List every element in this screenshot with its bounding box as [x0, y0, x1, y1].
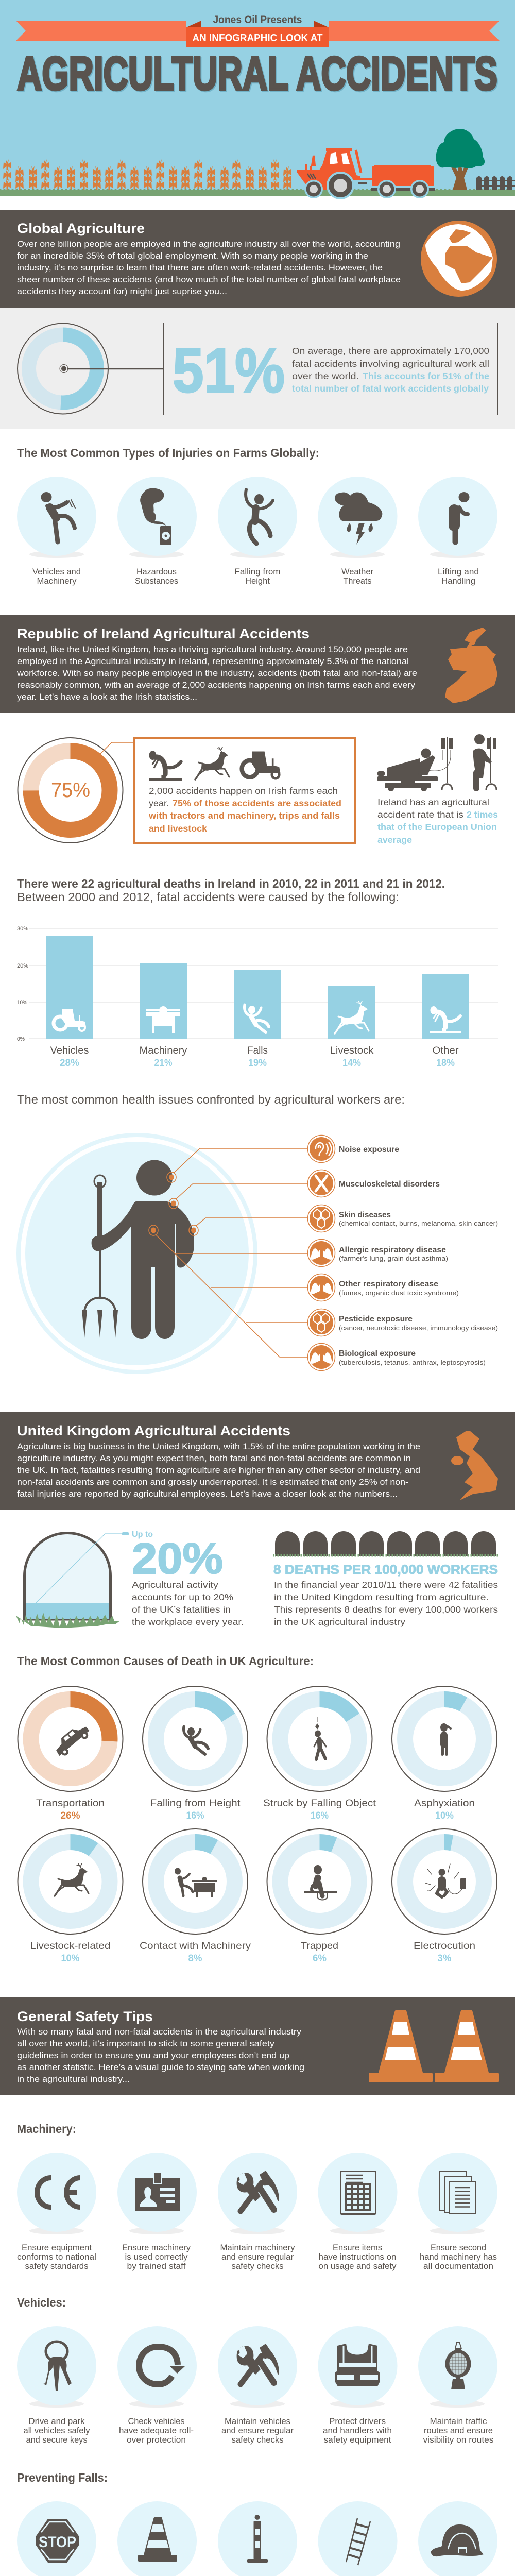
- callout text: 2,000 accidents happen on Irish farms each: [149, 786, 338, 796]
- heading: Republic of Ireland Agricultural Accidents: [17, 626, 310, 641]
- tip: maintain vehicles: safety checks: [232, 2435, 283, 2445]
- donut: electrocution: [392, 1829, 497, 1964]
- health item: noise exposure: Noise exposure: [339, 1145, 399, 1154]
- text block: accidents they account for) might just suprise you...: [17, 287, 227, 296]
- text block: [17, 1442, 420, 1499]
- gravestone graphic: 20%: [16, 1532, 129, 1628]
- panel: general safety tips: [0, 1997, 515, 2095]
- chart axis: 30%: [17, 926, 28, 932]
- tip: trained staff: [117, 2153, 197, 2271]
- heading: injury types: The Most Common Types of Injuries on Farms Globally:: [17, 446, 319, 460]
- injury: lifting and handling: Handling: [441, 577, 475, 586]
- tip: maintain machinery: and ensure regular: [221, 2252, 294, 2262]
- body markers: [149, 1172, 198, 1235]
- tip: documentation: all documentation: [423, 2262, 493, 2271]
- injury: weather threats: Weather: [341, 567, 374, 577]
- heading: United Kingdom Agricultural Accidents: [17, 1423, 290, 1438]
- donut: falling from height: 16%: [186, 1810, 204, 1821]
- bar: vehicles: [46, 936, 93, 1069]
- health item: other respiratory disease: (fumes, organic dust toxic syndrome): [339, 1289, 459, 1297]
- text block: Agriculture is big business in the United Kingdom, with 1.5% of the entire population working in the: [17, 1442, 420, 1451]
- tip: instructions: [318, 2153, 398, 2271]
- donut: asphyxiation: [392, 1686, 497, 1821]
- injury: falling from height: Height: [245, 577, 270, 586]
- tip: maintain machinery: Maintain machinery: [220, 2243, 295, 2252]
- tip: work at height: [218, 2501, 297, 2576]
- donut: trapped: [267, 1829, 372, 1964]
- health item: allergic respiratory disease: Allergic respiratory disease: [339, 1246, 446, 1255]
- health item: allergic respiratory disease: (farmer's lung, grain dust asthma): [339, 1255, 448, 1262]
- bar: other: 18%: [436, 1058, 455, 1069]
- tip: avoid roofs: [17, 2501, 96, 2576]
- donut: contact with machinery: [140, 1829, 251, 1964]
- text: ireland rate: average: [377, 835, 412, 845]
- callout text: [148, 786, 341, 834]
- health item: musculoskeletal disorders: Musculoskeletal disorders: [339, 1180, 440, 1189]
- donut: transportation: Transportation: [36, 1798, 105, 1809]
- text block: Ireland, like the United Kingdom, has a thriving agricultural industry. Around 150,000 people are: [17, 645, 408, 654]
- heading: ireland deaths: Between 2000 and 2012, fatal accidents were caused by the following:: [17, 890, 399, 904]
- icon: tractor: [242, 751, 281, 778]
- text block: non-fatal accidents are common and grossly underreported. It is estimated that only 25% of non-: [17, 1478, 408, 1487]
- tip: maintain vehicles: [218, 2326, 297, 2445]
- bar: machinery: Machinery: [139, 1045, 187, 1056]
- bar: machinery: 21%: [154, 1058, 173, 1069]
- donut: electrocution: 3%: [438, 1953, 452, 1964]
- tip: CE standards: [17, 2153, 96, 2271]
- heading: causes of death: The Most Common Causes of Death in UK Agriculture:: [17, 1654, 314, 1668]
- injury: falling from height: Falling from: [235, 567, 280, 577]
- callout text: year.: [149, 798, 169, 808]
- stat: up to 20%: accounts for up to 20%: [132, 1592, 233, 1602]
- text: ireland rate: that of the European Union: [377, 822, 497, 832]
- icon: tree: [436, 129, 485, 190]
- donut: electrocution: Electrocution: [414, 1941, 475, 1952]
- tip: roll-over protection: over protection: [127, 2435, 186, 2445]
- donut: falling from height: [143, 1686, 248, 1821]
- text block: guidelines in order to ensure you and your employees don’t end up: [17, 2051, 289, 2060]
- stat: up to 20%: 20%: [132, 1534, 223, 1583]
- stat text: fatal accidents involving agricultural work all: [292, 359, 489, 369]
- icon: tripping person: [149, 751, 182, 781]
- text block: Over one billion people are employed in the agriculture industry all over the world, accounting: [17, 240, 400, 249]
- tip: traffic routes: [418, 2326, 497, 2445]
- bar: other: [422, 974, 469, 1069]
- tip: traffic routes: visibility on routes: [423, 2435, 493, 2445]
- donut: livestock-related: [18, 1829, 123, 1964]
- presenter line: Jones Oil Presents: [213, 14, 302, 26]
- tip: traffic routes: routes and ensure: [424, 2426, 493, 2435]
- donut: struck by falling object: Struck by Falling Object: [263, 1798, 376, 1809]
- heading: machinery: Machinery:: [17, 2122, 76, 2136]
- tip: fragile roofs: [116, 2501, 197, 2576]
- callout: ireland accidents: [100, 738, 355, 843]
- tip: roll-over protection: have adequate roll-: [119, 2426, 194, 2435]
- heading: vehicles: Vehicles:: [17, 2296, 66, 2309]
- chart axis: 20%: [17, 963, 28, 969]
- tip: safety equipment: safety equipment: [323, 2435, 391, 2445]
- icon: hospital bed and patients: [377, 734, 496, 791]
- tip: keys: and secure keys: [26, 2435, 88, 2445]
- heading: ireland deaths: There were 22 agricultural deaths in Ireland in 2010, 22 in 2011 and 21 in 2012.: [17, 877, 445, 890]
- icon: map of ireland: [445, 628, 497, 703]
- text: ireland rate: [377, 797, 498, 845]
- tip: traffic routes: Maintain traffic: [430, 2417, 487, 2426]
- donut: contact with machinery: 8%: [188, 1953, 202, 1964]
- tip: ladders: [316, 2501, 399, 2576]
- bar: machinery: [139, 963, 187, 1069]
- worker backdrop circle: [16, 1133, 258, 1374]
- injury: hazardous substances: Hazardous: [136, 567, 177, 577]
- panel: 51% statistic: [0, 308, 515, 429]
- tip: keys: [17, 2326, 96, 2445]
- text block: the UK. In fact, fatalities resulting from agriculture are higher than any other sector of industry, and: [17, 1466, 420, 1475]
- health item: musculoskeletal disorders: [308, 1170, 440, 1197]
- stat: 8 deaths per 100,000: In the financial year 2010/11 there were 42 fatalities: [274, 1580, 498, 1590]
- donut chart 51%: [18, 324, 163, 414]
- text block: [17, 240, 401, 296]
- tip: safety equipment: and handlers with: [323, 2426, 392, 2435]
- tip: keys: Drive and park: [29, 2417, 85, 2426]
- header banner: ribbon: AN INFOGRAPHIC LOOK AT: [193, 32, 322, 44]
- tip: instructions: Ensure items: [333, 2243, 382, 2252]
- health item: biological exposure: [308, 1344, 486, 1370]
- donut: falling from height: Falling from Height: [150, 1798, 241, 1809]
- stat: 8 deaths per 100,000: in the United Kingdom resulting from agriculture.: [274, 1592, 489, 1602]
- bar: falls: [234, 970, 281, 1069]
- text block: [17, 2027, 304, 2084]
- chart axis: 0%: [17, 1036, 25, 1042]
- text block: year. Let’s have a look at the Irish statistics...: [17, 692, 197, 702]
- tombstones row: 8 deaths: [273, 1531, 498, 1556]
- icon: deer: [195, 747, 229, 779]
- big number 51%: 51%: [173, 335, 285, 405]
- text block: in the agricultural industry...: [17, 2075, 130, 2084]
- stat: 8 deaths per 100,000: This represents 8 deaths for every 100,000 workers: [274, 1604, 498, 1615]
- pitchfork: [82, 1175, 118, 1338]
- text: ireland rate: 2 times: [467, 809, 498, 820]
- text block: [16, 645, 417, 702]
- text block: reasonably common, with an average of 2,000 accidents happening on Irish farms each and every: [17, 681, 416, 690]
- donut: contact with machinery: Contact with Machinery: [140, 1941, 251, 1952]
- health item: allergic respiratory disease: [308, 1240, 448, 1266]
- text block: employed in the Agricultural industry in Ireland, representing approximately 5.3% of the national: [17, 657, 409, 666]
- bar: livestock: 14%: [342, 1058, 361, 1069]
- icon: traffic cones: [369, 2010, 499, 2082]
- donut: asphyxiation: Asphyxiation: [414, 1798, 475, 1809]
- text block: workforce. With so many people employed in the industry, accidents (both fatal and non-fatal) are: [16, 669, 417, 678]
- stat: up to 20%: of the UK’s fatalities in: [132, 1604, 231, 1615]
- donut chart 75%: [18, 738, 123, 843]
- stat text: This accounts for 51% of the: [363, 371, 489, 381]
- tip: keys: all vehicles safely: [24, 2426, 90, 2435]
- heading: preventing falls: Preventing Falls:: [17, 2471, 108, 2484]
- icon: globe: [421, 221, 497, 297]
- donut: transportation: [18, 1686, 123, 1821]
- tip: trained staff: by trained staff: [127, 2262, 186, 2271]
- donut chart 75%: 75%: [51, 779, 90, 802]
- callout text: and livestock: [149, 823, 207, 834]
- health item: biological exposure: (tuberculosis, tetanus, anthrax, leptospyrosis): [339, 1359, 486, 1366]
- stat: 8 deaths per 100,000: 8 DEATHS PER 100,000 WORKERS: [273, 1563, 498, 1577]
- ground: [0, 190, 515, 196]
- text block: sheer number of these accidents (and how much of the total number of global fatal workplace: [17, 275, 401, 284]
- tip: CE standards: Ensure equipment: [22, 2243, 92, 2252]
- text: ireland rate: Ireland has an agricultural: [377, 797, 489, 807]
- text block: for an incredible 35% of total global employment. With so many people working in the: [17, 251, 368, 261]
- worker figure: [92, 1160, 194, 1339]
- donut: livestock-related: 10%: [61, 1953, 80, 1964]
- callout text: 75% of those accidents are associated: [173, 798, 341, 808]
- injury: vehicles and machinery: Vehicles and: [32, 567, 81, 577]
- injury: lifting and handling: Lifting and: [438, 567, 479, 577]
- bar: falls: Falls: [247, 1045, 268, 1056]
- injury: falling from height: [218, 477, 297, 586]
- tip: maintain vehicles: and ensure regular: [221, 2426, 294, 2435]
- stat: up to 20%: Up to: [132, 1530, 153, 1539]
- callout text: with tractors and machinery, trips and falls: [148, 810, 340, 821]
- donut: trapped: Trapped: [301, 1941, 338, 1952]
- tip: documentation: hand machinery has: [420, 2252, 497, 2262]
- tip: maintain machinery: safety checks: [232, 2262, 283, 2271]
- donut: struck by falling object: 16%: [311, 1810, 329, 1821]
- heading: General Safety Tips: [17, 2009, 153, 2024]
- tip: footwear and equipment: [418, 2501, 498, 2576]
- stat: up to 20%: [132, 1530, 244, 1627]
- text block: all over the world, it’s important to stick to some general safety: [17, 2039, 275, 2048]
- callout lines: [156, 1148, 308, 1357]
- health item: pesticide exposure: (cancer, neurotoxic disease, immunology disease): [339, 1324, 498, 1332]
- chart axis: 10%: [17, 999, 27, 1006]
- bar: falls: 19%: [248, 1058, 267, 1069]
- bar chart: causes of fatal accidents: [17, 926, 498, 1069]
- heading: Global Agriculture: [17, 221, 145, 236]
- injury: vehicles and machinery: [17, 477, 96, 586]
- text block: fatal injuries are reported by agricultural employees. Let’s have a closer look at the numbers...: [17, 1489, 398, 1499]
- tip: safety equipment: [318, 2326, 398, 2445]
- text block: industry, it’s no surprise to learn that there are often work-related accidents. However, the: [17, 263, 383, 273]
- health item: biological exposure: Biological exposure: [339, 1349, 416, 1358]
- crop field: [3, 159, 291, 190]
- stat text: total number of fatal work accidents globally: [292, 383, 489, 394]
- tip: roll-over protection: Check vehicles: [128, 2417, 184, 2426]
- stat: 8 deaths per 100,000: [273, 1563, 498, 1627]
- tip: trained staff: is used correctly: [125, 2252, 188, 2262]
- stat: up to 20%: the workplace every year.: [132, 1617, 244, 1627]
- text block: agriculture industry. As you might expect then, both fatal and non-fatal accidents are common in: [17, 1454, 411, 1463]
- heading: health issues: The most common health issues confronted by agricultural workers are:: [17, 1093, 405, 1106]
- health item: other respiratory disease: [308, 1274, 459, 1301]
- tip: CE standards: safety standards: [25, 2262, 89, 2271]
- donut: struck by falling object: [263, 1686, 376, 1821]
- bar: vehicles: Vehicles: [50, 1045, 89, 1056]
- bar: livestock: Livestock: [330, 1045, 374, 1056]
- injury: weather threats: Threats: [343, 577, 372, 586]
- injury: lifting and handling: [418, 477, 497, 586]
- stat: up to 20%: Agricultural activity: [132, 1580, 218, 1590]
- tip: documentation: Ensure second: [431, 2243, 486, 2252]
- tip: instructions: have instructions on: [318, 2252, 397, 2262]
- tip: maintain machinery: [218, 2153, 297, 2271]
- header banner: ribbon: [16, 21, 500, 47]
- donut: transportation: 26%: [61, 1810, 80, 1821]
- health item: other respiratory disease: Other respiratory disease: [339, 1280, 438, 1289]
- donut: trapped: 6%: [313, 1953, 327, 1964]
- stat text: On average, there are approximately 170,000: [292, 346, 489, 356]
- health item: skin diseases: [308, 1205, 498, 1232]
- injury: hazardous substances: [117, 477, 197, 586]
- text: ireland rate: accident rate that is: [377, 809, 464, 820]
- health item: skin diseases: Skin diseases: [339, 1211, 391, 1219]
- header: sky background: [0, 0, 515, 196]
- bar: vehicles: 28%: [60, 1058, 79, 1069]
- stat text: [292, 346, 489, 394]
- bar: other: Other: [433, 1045, 459, 1056]
- icon: map of uk: [451, 1431, 498, 1500]
- heading: ireland deaths: [17, 877, 445, 904]
- injury: hazardous substances: Substances: [135, 577, 178, 586]
- chart axis: [17, 926, 498, 1042]
- health item: skin diseases: (chemical contact, burns, melanoma, skin cancer): [339, 1219, 498, 1227]
- donut: asphyxiation: 10%: [435, 1810, 454, 1821]
- tip: roll-over protection: [117, 2326, 197, 2445]
- tip: CE standards: conforms to national: [17, 2252, 96, 2262]
- tip: instructions: on usage and safety: [318, 2262, 397, 2271]
- health item: pesticide exposure: [308, 1309, 498, 1336]
- injury: vehicles and machinery: Machinery: [37, 577, 77, 586]
- panel: republic of ireland: [0, 615, 515, 713]
- tip: documentation: [418, 2153, 497, 2271]
- diagram: farm worker with health issues: [16, 1133, 498, 1374]
- stat: 8 deaths per 100,000: in the UK agricultural industry: [274, 1617, 405, 1627]
- bar: livestock: [328, 986, 375, 1069]
- health item: pesticide exposure: Pesticide exposure: [339, 1315, 413, 1324]
- panel: united kingdom: [0, 1412, 515, 1510]
- tip: safety equipment: Protect drivers: [329, 2417, 386, 2426]
- text block: With so many fatal and non-fatal accidents in the agricultural industry: [17, 2027, 302, 2037]
- injury: weather threats: [318, 477, 398, 586]
- panel: global agriculture: [0, 210, 515, 308]
- donut: livestock-related: Livestock-related: [30, 1941, 110, 1952]
- icon: fence: [476, 176, 515, 190]
- stat text: over the world.: [292, 371, 359, 381]
- tip: maintain vehicles: Maintain vehicles: [225, 2417, 290, 2426]
- health item: noise exposure: [308, 1136, 399, 1162]
- icon: tractor and trailer: [297, 148, 435, 199]
- text block: as another statistic. Here’s a visual guide to staying safe when working: [17, 2063, 304, 2072]
- tip: trained staff: Ensure machinery: [122, 2243, 191, 2252]
